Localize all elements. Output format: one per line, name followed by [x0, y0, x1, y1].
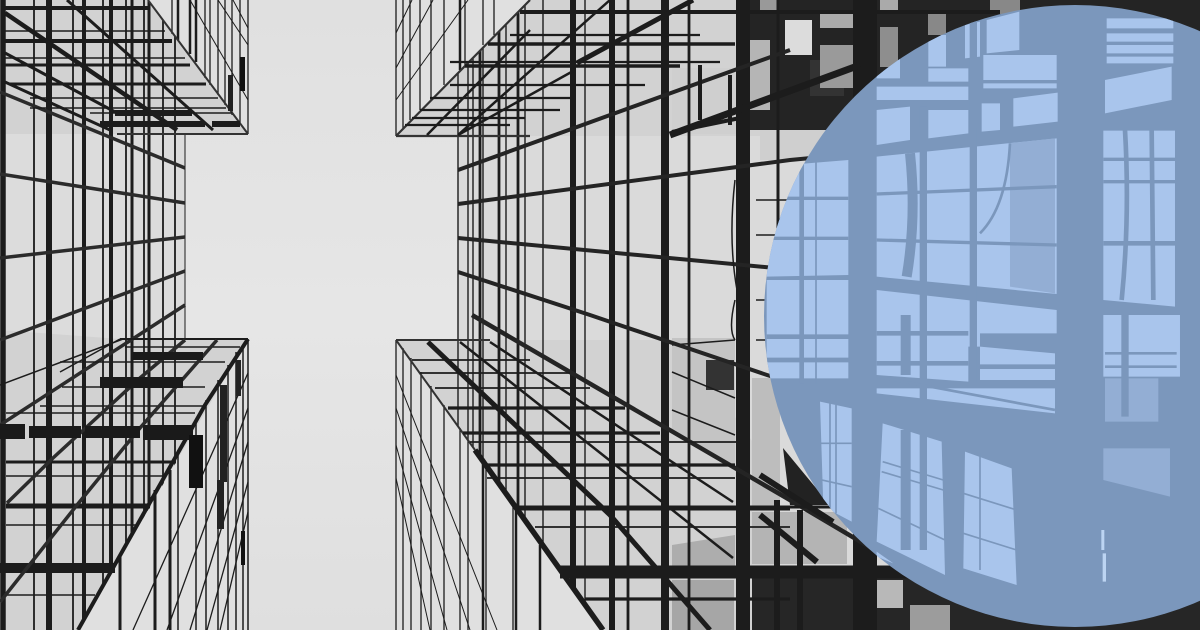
- reflection panels mid-right and lower-right: [672, 338, 1200, 630]
- dark reflection at top right: [672, 0, 1200, 160]
- right tower: [396, 0, 1200, 630]
- circle reflection panes: [767, 12, 1180, 585]
- blue circle overlay: [760, 0, 1200, 630]
- left tower upper block: [5, 0, 248, 134]
- right tower lower block: [396, 340, 1000, 630]
- left tower lower block: [0, 339, 248, 630]
- left tower: [0, 0, 248, 630]
- right tower upper block: [396, 0, 1000, 136]
